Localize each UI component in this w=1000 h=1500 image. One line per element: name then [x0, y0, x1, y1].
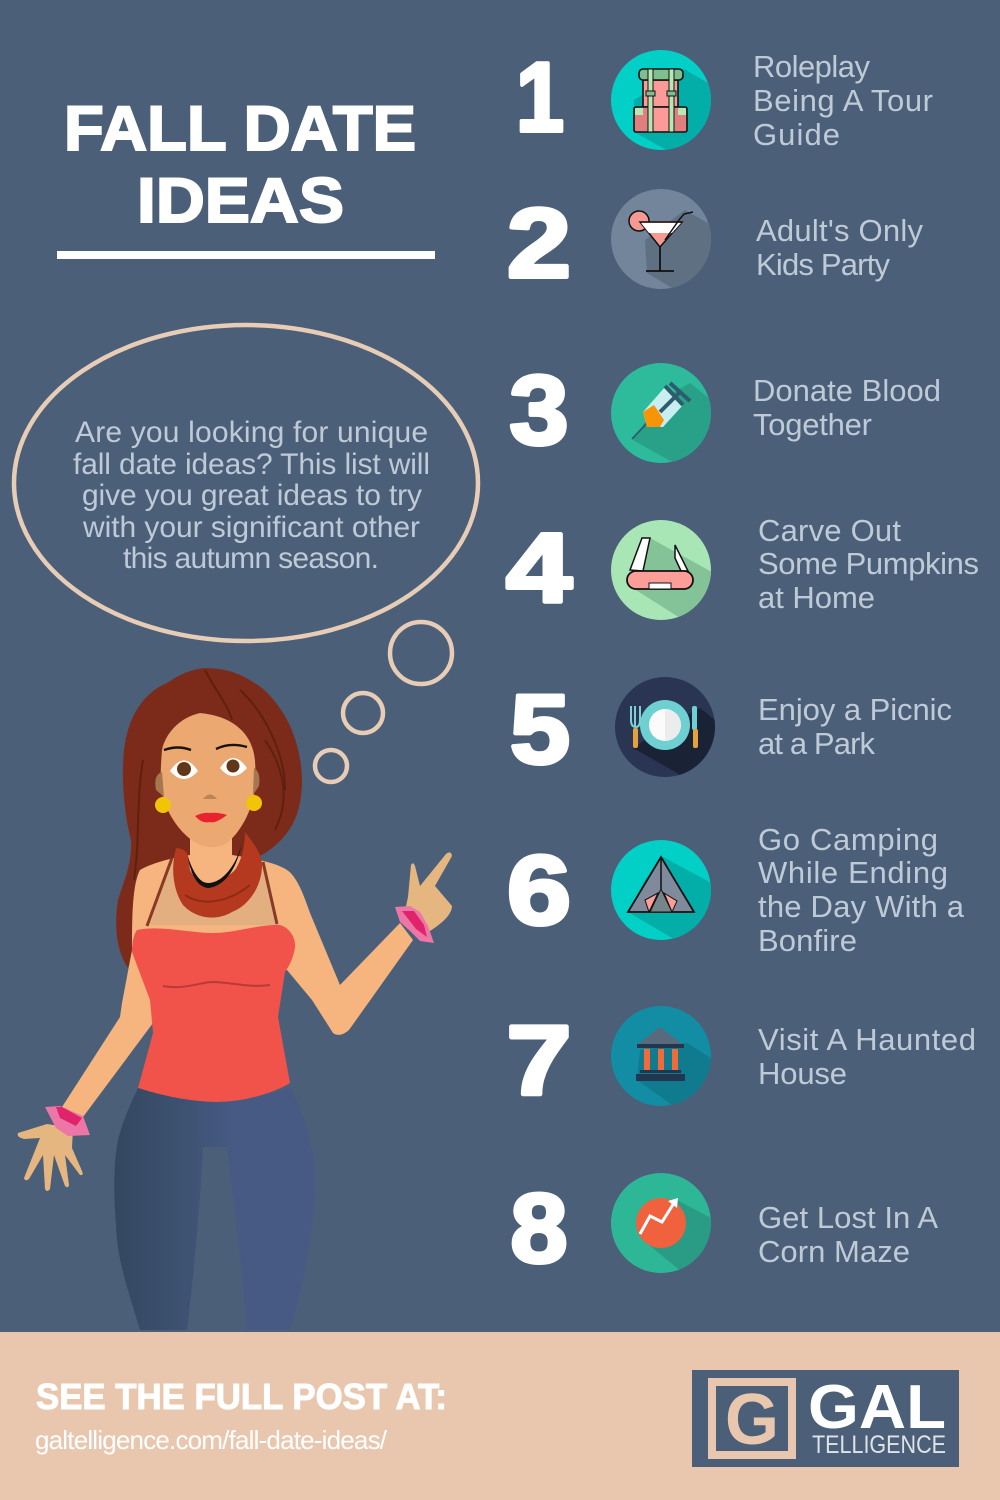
label 6: While Ending	[758, 855, 948, 890]
label 6: Bonfire	[758, 923, 857, 958]
label 1: Being A Tour	[753, 83, 933, 118]
dress straps	[147, 858, 277, 926]
item 6: 6	[507, 835, 571, 945]
brows	[164, 745, 247, 750]
item 5: 5	[510, 674, 570, 784]
earrings	[155, 797, 171, 813]
item 1	[520, 50, 932, 150]
label 5	[758, 692, 952, 761]
label 8: Get Lost In A	[758, 1200, 938, 1235]
title: IDEAS	[137, 166, 344, 236]
item 5	[511, 677, 952, 777]
speech bubble with intro text: give you great ideas to try	[82, 479, 422, 512]
eyes	[170, 760, 198, 779]
footer call to action: SEE THE FULL POST AT:	[36, 1376, 447, 1417]
item 4: 4	[506, 513, 572, 623]
left scrunchie	[45, 1106, 90, 1136]
label 6	[758, 822, 965, 958]
label 5: Enjoy a Picnic	[758, 692, 952, 727]
icon: temple	[611, 1006, 711, 1106]
thought bubbles	[315, 622, 452, 782]
label 4	[758, 513, 979, 615]
right scrunchie	[395, 906, 434, 943]
item 7	[509, 1006, 974, 1106]
label 2: Kids Party	[756, 247, 890, 282]
speech bubble with intro text: Are you looking for unique	[75, 416, 428, 449]
icon: cocktail	[611, 189, 711, 289]
label 1: Roleplay	[753, 49, 870, 84]
icon: pocket knife	[611, 520, 711, 620]
label 2: Adult's Only	[756, 213, 924, 248]
label 7: House	[758, 1056, 847, 1091]
item 6	[508, 828, 964, 952]
icon: plate and cutlery	[615, 677, 715, 777]
icon: rising chart	[611, 1173, 711, 1273]
logo	[692, 1370, 959, 1467]
item 3	[510, 363, 939, 463]
label 1: Guide	[753, 117, 840, 152]
icon: tent	[611, 840, 711, 940]
label 3	[753, 373, 941, 442]
woman illustration	[18, 668, 452, 1330]
speech bubble with intro text: fall date ideas? This list will	[73, 448, 430, 481]
title	[57, 94, 435, 259]
item 3: 3	[510, 355, 568, 465]
label 8: Corn Maze	[758, 1234, 910, 1269]
label 3: Donate Blood	[753, 373, 941, 408]
footer url: galtelligence.com/fall-date-ideas/	[35, 1425, 388, 1455]
logo: GAL	[808, 1373, 946, 1442]
jeans	[114, 1087, 315, 1330]
label 6: Go Camping	[758, 822, 938, 857]
label 7: Visit A Haunted	[758, 1022, 976, 1057]
scarf	[173, 832, 262, 918]
hair	[116, 668, 302, 968]
footer band	[0, 1332, 1000, 1500]
label 3: Together	[753, 407, 872, 442]
label 8	[758, 1200, 938, 1269]
nose and lips	[203, 794, 217, 799]
body skin	[62, 830, 413, 1117]
top	[132, 925, 295, 1102]
item 1: 1	[516, 42, 564, 152]
speech bubble with intro text	[14, 325, 478, 641]
item 8	[512, 1173, 938, 1273]
left hand	[18, 1124, 83, 1191]
label 1	[753, 49, 933, 152]
speech bubble with intro text: this autumn season.	[123, 542, 379, 575]
label 4: Carve Out	[758, 513, 901, 548]
logo: TELLIGENCE	[812, 1431, 946, 1459]
label 7	[758, 1022, 976, 1091]
icon: backpack	[611, 50, 711, 150]
label 4: at Home	[758, 580, 875, 615]
icon: syringe	[611, 363, 711, 463]
label 2	[756, 213, 924, 282]
label 4: Some Pumpkins	[758, 546, 979, 581]
item 7: 7	[506, 1005, 572, 1115]
item 2	[508, 189, 923, 289]
logo: G	[725, 1380, 779, 1460]
item 8: 8	[510, 1173, 568, 1283]
title: FALL DATE	[64, 94, 416, 164]
item 2: 2	[507, 188, 571, 298]
face	[161, 713, 255, 847]
chest shade	[150, 860, 278, 925]
right hand	[403, 852, 452, 931]
label 6: the Day With a	[758, 889, 965, 924]
item 4	[505, 520, 978, 620]
label 5: at a Park	[758, 726, 876, 761]
ears	[155, 768, 259, 797]
speech bubble with intro text: with your significant other	[82, 511, 420, 544]
